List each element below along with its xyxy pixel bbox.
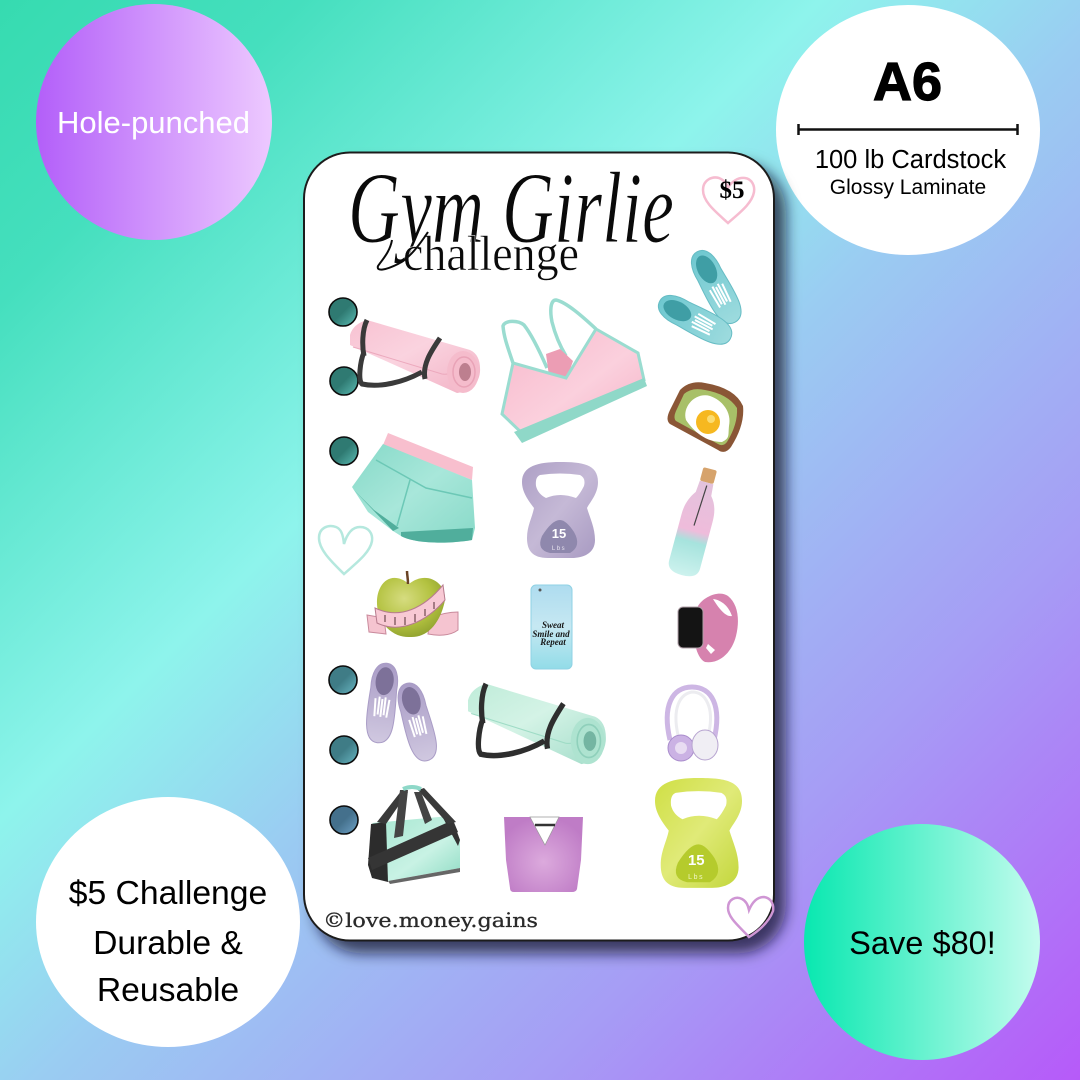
callout: A6 size and material: A6: [873, 52, 942, 112]
card panel: [304, 152, 774, 940]
callout: A6 size and material: [776, 5, 1040, 255]
icon: smartphone: Repeat: [539, 637, 566, 647]
icon: apple with measuring tape: [367, 571, 458, 637]
icon: smartphone: Smile and: [532, 629, 570, 639]
callout: A6 size and material: Glossy Laminate: [830, 176, 986, 199]
icon: smartphone: Sweat: [542, 620, 564, 630]
icon: teal sneakers: [653, 245, 747, 351]
icon: lilac kettlebell: 15: [552, 526, 566, 541]
callout: save $80: Save $80!: [849, 924, 996, 961]
price heart: $5: [720, 177, 744, 204]
icon: lilac sneakers: [364, 662, 441, 764]
icon: weight scale: [504, 817, 583, 892]
icon: smartphone: [531, 585, 572, 669]
callout: save $80: [804, 824, 1040, 1060]
title: Gym Girlie: [348, 152, 674, 264]
icon: mint heart: [319, 526, 372, 574]
title: challenge: [403, 225, 579, 281]
callout: hole-punched: Hole-punched: [57, 105, 250, 140]
challenge card: [304, 152, 774, 941]
callout: A6 size and material: 100 lb Cardstock: [815, 146, 1006, 174]
icon: lime kettlebell: Lbs: [688, 874, 704, 881]
icon: lime kettlebell: 15: [688, 853, 704, 869]
icon: purple heart: [728, 897, 773, 937]
callout: $5 challenge durable and reusable: Durable &: [93, 924, 243, 962]
callout: hole-punched: [36, 4, 272, 240]
price heart: [703, 177, 754, 223]
icon: lilac kettlebell: Lbs: [552, 546, 566, 552]
icon: water bottle: [666, 465, 726, 579]
icon: lime kettlebell: [655, 778, 742, 888]
icon: smartwatch: [678, 594, 738, 662]
copyright credit: ©love.money.gains: [323, 908, 538, 932]
icon: pink yoga mat: [350, 320, 480, 393]
icon: pink sports bra: [502, 300, 647, 443]
icon: mint yoga mat: [468, 684, 606, 764]
icon: mint shorts: [352, 433, 475, 543]
icon: avocado egg toast: [668, 382, 743, 452]
callout: $5 challenge durable and reusable: Reusable: [97, 971, 239, 1009]
callout: $5 challenge durable and reusable: [36, 797, 300, 1047]
icon: headphones: [667, 687, 718, 761]
callout: $5 challenge durable and reusable: $5 Challenge: [69, 874, 267, 912]
icon: lilac kettlebell: [522, 462, 598, 558]
binder holes: [329, 298, 358, 834]
icon: gym duffel bag: [368, 787, 460, 884]
